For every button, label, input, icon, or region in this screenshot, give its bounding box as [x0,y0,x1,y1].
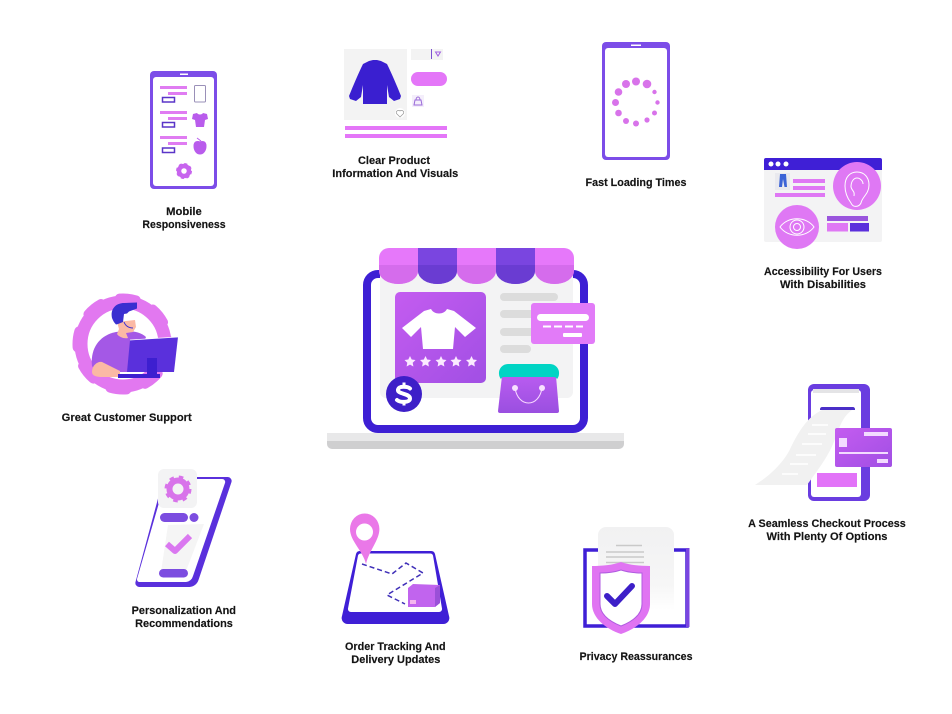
label: Mobile [166,206,202,218]
icon: phone with product list [150,71,217,189]
feature: fast loading times [586,42,686,189]
icon: browser window with ear and eye [764,158,882,249]
icon: phone with loading spinner [602,42,670,160]
label: With Disabilities [780,279,866,291]
feature: personalization and recommendations [132,469,236,630]
product card with shirt and stars [395,292,486,383]
label [332,155,458,180]
label: Recommendations [135,618,233,630]
label: Accessibility For Users [764,266,882,278]
shop awning [379,248,574,284]
label: Great Customer Support [62,412,192,424]
shopping bag [498,364,559,413]
feature: accessibility [764,158,882,291]
icon: product page with sweater [344,49,447,138]
laptop base [327,433,624,449]
label [748,518,906,543]
icon: phone with receipt and credit card [755,384,892,501]
label: Delivery Updates [351,654,440,666]
feature: clear product information and visuals [332,49,458,180]
icon: document with shield and check [585,527,690,634]
label: Fast Loading Times [586,177,686,189]
label [764,266,882,291]
label: Privacy Reassurances [580,651,692,663]
label: Responsiveness [142,219,226,231]
label [345,641,446,666]
label [132,605,236,630]
dollar coin [386,376,422,412]
label: With Plenty Of Options [766,531,888,543]
label: Personalization And [132,605,236,617]
feature: privacy reassurances [580,527,692,663]
feature: great customer support [62,298,192,424]
label: A Seamless Checkout Process [748,518,906,530]
icon: map with pin, route and parcel [342,514,449,624]
text placeholder bars [500,293,558,353]
central illustration: online store laptop [327,248,624,449]
label [142,206,226,231]
label: Information And Visuals [332,168,458,180]
laptop screen [367,270,584,429]
feature: order tracking and delivery updates [342,514,449,666]
payment card [531,303,595,344]
icon: slanted phone with gear and check [135,469,232,587]
label: Clear Product [358,155,430,167]
label: Order Tracking And [345,641,446,653]
feature: seamless checkout [748,384,906,543]
feature: mobile responsiveness [142,71,226,231]
icon: support agent with gear and monitor [77,298,178,390]
